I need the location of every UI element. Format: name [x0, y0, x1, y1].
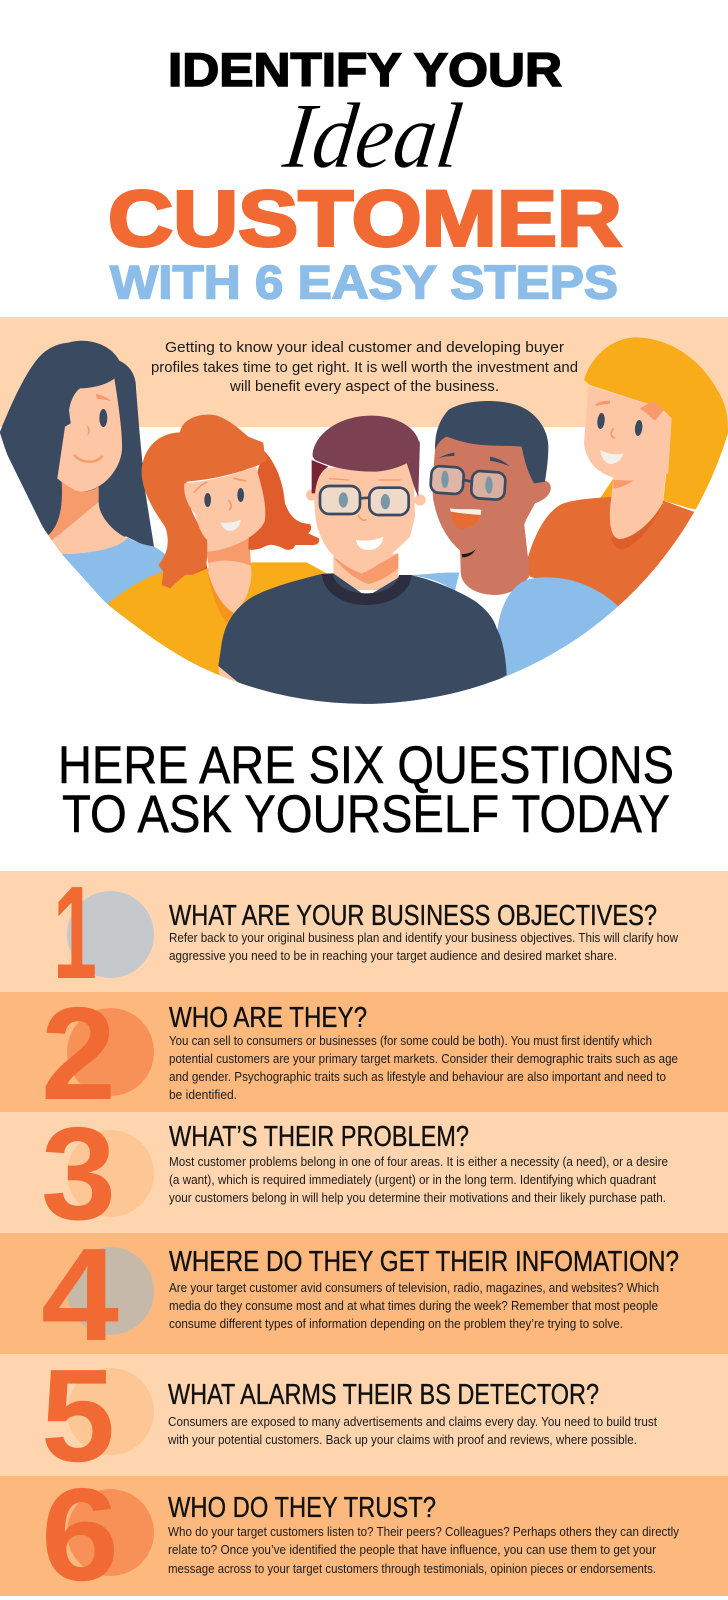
step 3 text [169, 1154, 668, 1205]
step 5 panel [0, 1342, 728, 1489]
step 3 circle [67, 1130, 154, 1217]
small blue shirt piece [407, 572, 459, 591]
step 5 text: with your potential customers. Back up your claims with proof and reviews, where possible. [167, 1432, 637, 1447]
section heading [58, 736, 674, 844]
step 3 heading: WHAT’S THEIR PROBLEM? [169, 1121, 469, 1153]
hero band background [0, 317, 728, 427]
step 1 text [169, 930, 679, 963]
step 3 text: your customers belong in will help you determine their motivations and their likely purchase path. [169, 1190, 666, 1205]
illustration: group of five people [0, 337, 728, 730]
intro text [151, 339, 578, 395]
step 6 text: relate to? Once you’ve identified the people that have influence, you can use them to get your [168, 1542, 657, 1557]
step 3 text: (a want), which is required immediately (urgent) or in the long term. Identifying which quadrant [169, 1172, 656, 1187]
title: IDENTIFY YOUR [168, 43, 562, 96]
step 4 text: consume different types of information depending on the problem they’re trying to solve. [169, 1316, 623, 1331]
step 2 circle [67, 1008, 154, 1096]
intro text: Getting to know your ideal customer and developing buyer [165, 339, 564, 356]
person: woman with orange hair [107, 415, 327, 693]
step 2 text: be identified. [169, 1087, 237, 1102]
step 1 text: aggressive you need to be in reaching your target audience and desired market share. [169, 948, 617, 963]
step 5 heading: WHAT ALARMS THEIR BS DETECTOR? [168, 1379, 599, 1411]
head and neck [306, 416, 426, 590]
section heading: TO ASK YOURSELF TODAY [62, 785, 670, 844]
step 2 number: 2 [41, 980, 116, 1127]
step 1 number: 1 [53, 859, 97, 1006]
step 6 panel [0, 1461, 728, 1600]
step 3 number: 3 [41, 1100, 116, 1247]
step 6 circle [67, 1489, 154, 1576]
step 3 panel [0, 1100, 728, 1247]
step 1 panel [0, 859, 728, 1006]
person: blue shoulder [497, 577, 618, 680]
step 6 text [168, 1524, 679, 1576]
person: man with brown skin and glasses [430, 401, 551, 595]
step 4 panel [0, 1221, 728, 1368]
step 4 text [169, 1280, 659, 1331]
step 6 heading: WHO DO THEY TRUST? [168, 1492, 436, 1524]
person: woman with blonde hair [527, 337, 728, 607]
step 4 text: Are your target customer avid consumers of television, radio, magazines, and websites? Which [169, 1280, 659, 1295]
step 6 text: message across to your target customers through testimonials, opinion pieces or endorsements. [168, 1561, 656, 1576]
step 2 text: You can sell to consumers or businesses (for some could be both). You must first identify which [169, 1033, 652, 1048]
step 2 text: potential customers are your primary target markets. Consider their demographic traits such as age [169, 1051, 678, 1066]
dark t-shirt [218, 573, 507, 705]
intro text: profiles takes time to get right. It is well worth the investment and [151, 359, 578, 376]
step 4 number: 4 [41, 1221, 119, 1368]
step 2 heading: WHO ARE THEY? [169, 1002, 367, 1034]
step 3 text: Most customer problems belong in one of four areas. It is either a necessity (a need), or a desire [169, 1154, 668, 1169]
step 6 text: Who do your target customers listen to? Their peers? Colleagues? Perhaps others they can directly [168, 1524, 679, 1539]
step 2 text [169, 1033, 678, 1102]
step 1 text: Refer back to your original business plan and identify your business objectives. This will clarify how [169, 930, 679, 945]
step 5 text [167, 1414, 657, 1447]
person: centre man with glasses [218, 416, 507, 705]
title: CUSTOMER [108, 174, 622, 262]
step 4 text: media do they consume most and at what times during the week? Remember that most people [169, 1298, 658, 1313]
step 5 number: 5 [41, 1342, 115, 1489]
title: Ideal [277, 85, 468, 188]
step 5 circle [67, 1368, 154, 1455]
person: woman with dark hair [0, 341, 168, 604]
title [108, 43, 622, 308]
step 4 circle [67, 1247, 154, 1335]
step 2 text: and gender. Psychographic traits such as lifestyle and behaviour are also important and need to [169, 1069, 666, 1084]
intro text: will benefit every aspect of the business. [229, 378, 499, 395]
title: WITH 6 EASY STEPS [110, 256, 618, 308]
step 5 text: Consumers are exposed to many advertisements and claims every day. You need to build trust [168, 1414, 657, 1429]
step 2 panel [0, 980, 728, 1127]
step 1 circle [67, 891, 154, 978]
